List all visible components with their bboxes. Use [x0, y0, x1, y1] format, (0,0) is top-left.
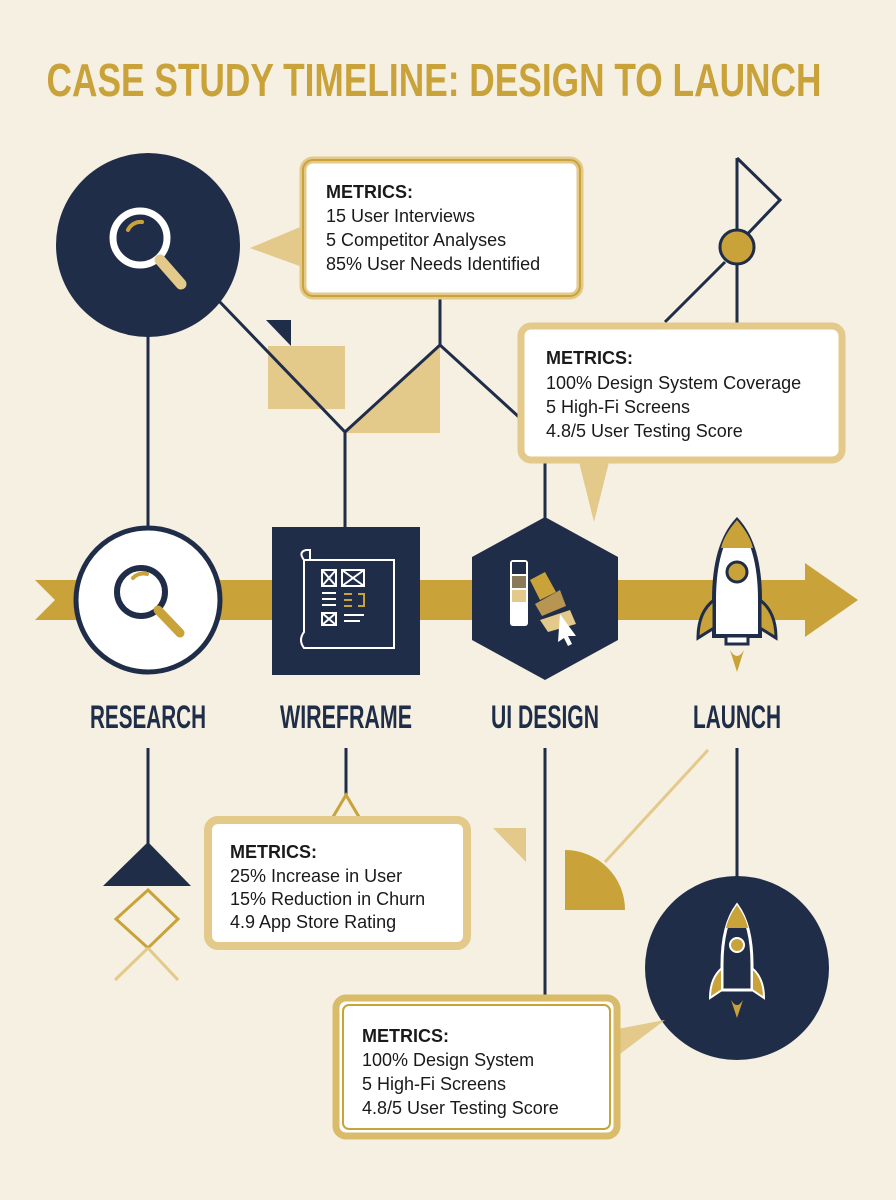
arrow: timeline band	[35, 563, 858, 637]
icon: flag circle	[720, 230, 754, 264]
callout: ui design metrics: 100% Design System Coverage	[546, 373, 801, 393]
labels: UI DESIGN	[491, 699, 599, 735]
icon: launch circle bottom	[645, 876, 829, 1060]
callout: ui design metrics: 5 High-Fi Screens	[546, 397, 690, 417]
decorative shapes bottom left	[103, 795, 625, 980]
callout: research metrics: 85% User Needs Identified	[326, 254, 540, 274]
callout: research metrics: 15 User Interviews	[326, 206, 475, 226]
callout: wireframe metrics: METRICS:	[230, 842, 317, 862]
connector lines bottom	[148, 748, 737, 998]
callout: launch metrics: 100% Design System	[362, 1050, 534, 1070]
callout: research metrics: 5 Competitor Analyses	[326, 230, 506, 250]
labels	[90, 699, 781, 735]
icon: wireframe node	[272, 527, 420, 675]
decorative shapes top	[266, 320, 440, 433]
labels: RESEARCH	[90, 699, 206, 735]
icon: ui design hexagon	[472, 517, 618, 680]
callout: launch metrics: METRICS:	[362, 1026, 449, 1046]
connector lines top	[148, 158, 780, 530]
icon: launch rocket	[698, 520, 776, 672]
callout: research metrics: METRICS:	[326, 182, 413, 202]
callout: wireframe metrics	[208, 820, 467, 946]
callout: launch metrics: 5 High-Fi Screens	[362, 1074, 506, 1094]
callout: research metrics	[250, 160, 580, 296]
callout: ui design metrics: METRICS:	[546, 348, 633, 368]
labels: LAUNCH	[693, 699, 781, 735]
icon: research node	[76, 528, 220, 672]
icon: research circle top	[56, 153, 240, 337]
callout: launch metrics: 4.8/5 User Testing Score	[362, 1098, 559, 1118]
callout: wireframe metrics: 15% Reduction in Churn	[230, 889, 425, 909]
callout: wireframe metrics: 4.9 App Store Rating	[230, 912, 396, 932]
callout: wireframe metrics: 25% Increase in User	[230, 866, 402, 886]
labels: WIREFRAME	[280, 699, 412, 735]
callout: ui design metrics	[521, 326, 842, 522]
callout: ui design metrics: 4.8/5 User Testing Score	[546, 421, 743, 441]
callout: launch metrics	[336, 998, 665, 1136]
